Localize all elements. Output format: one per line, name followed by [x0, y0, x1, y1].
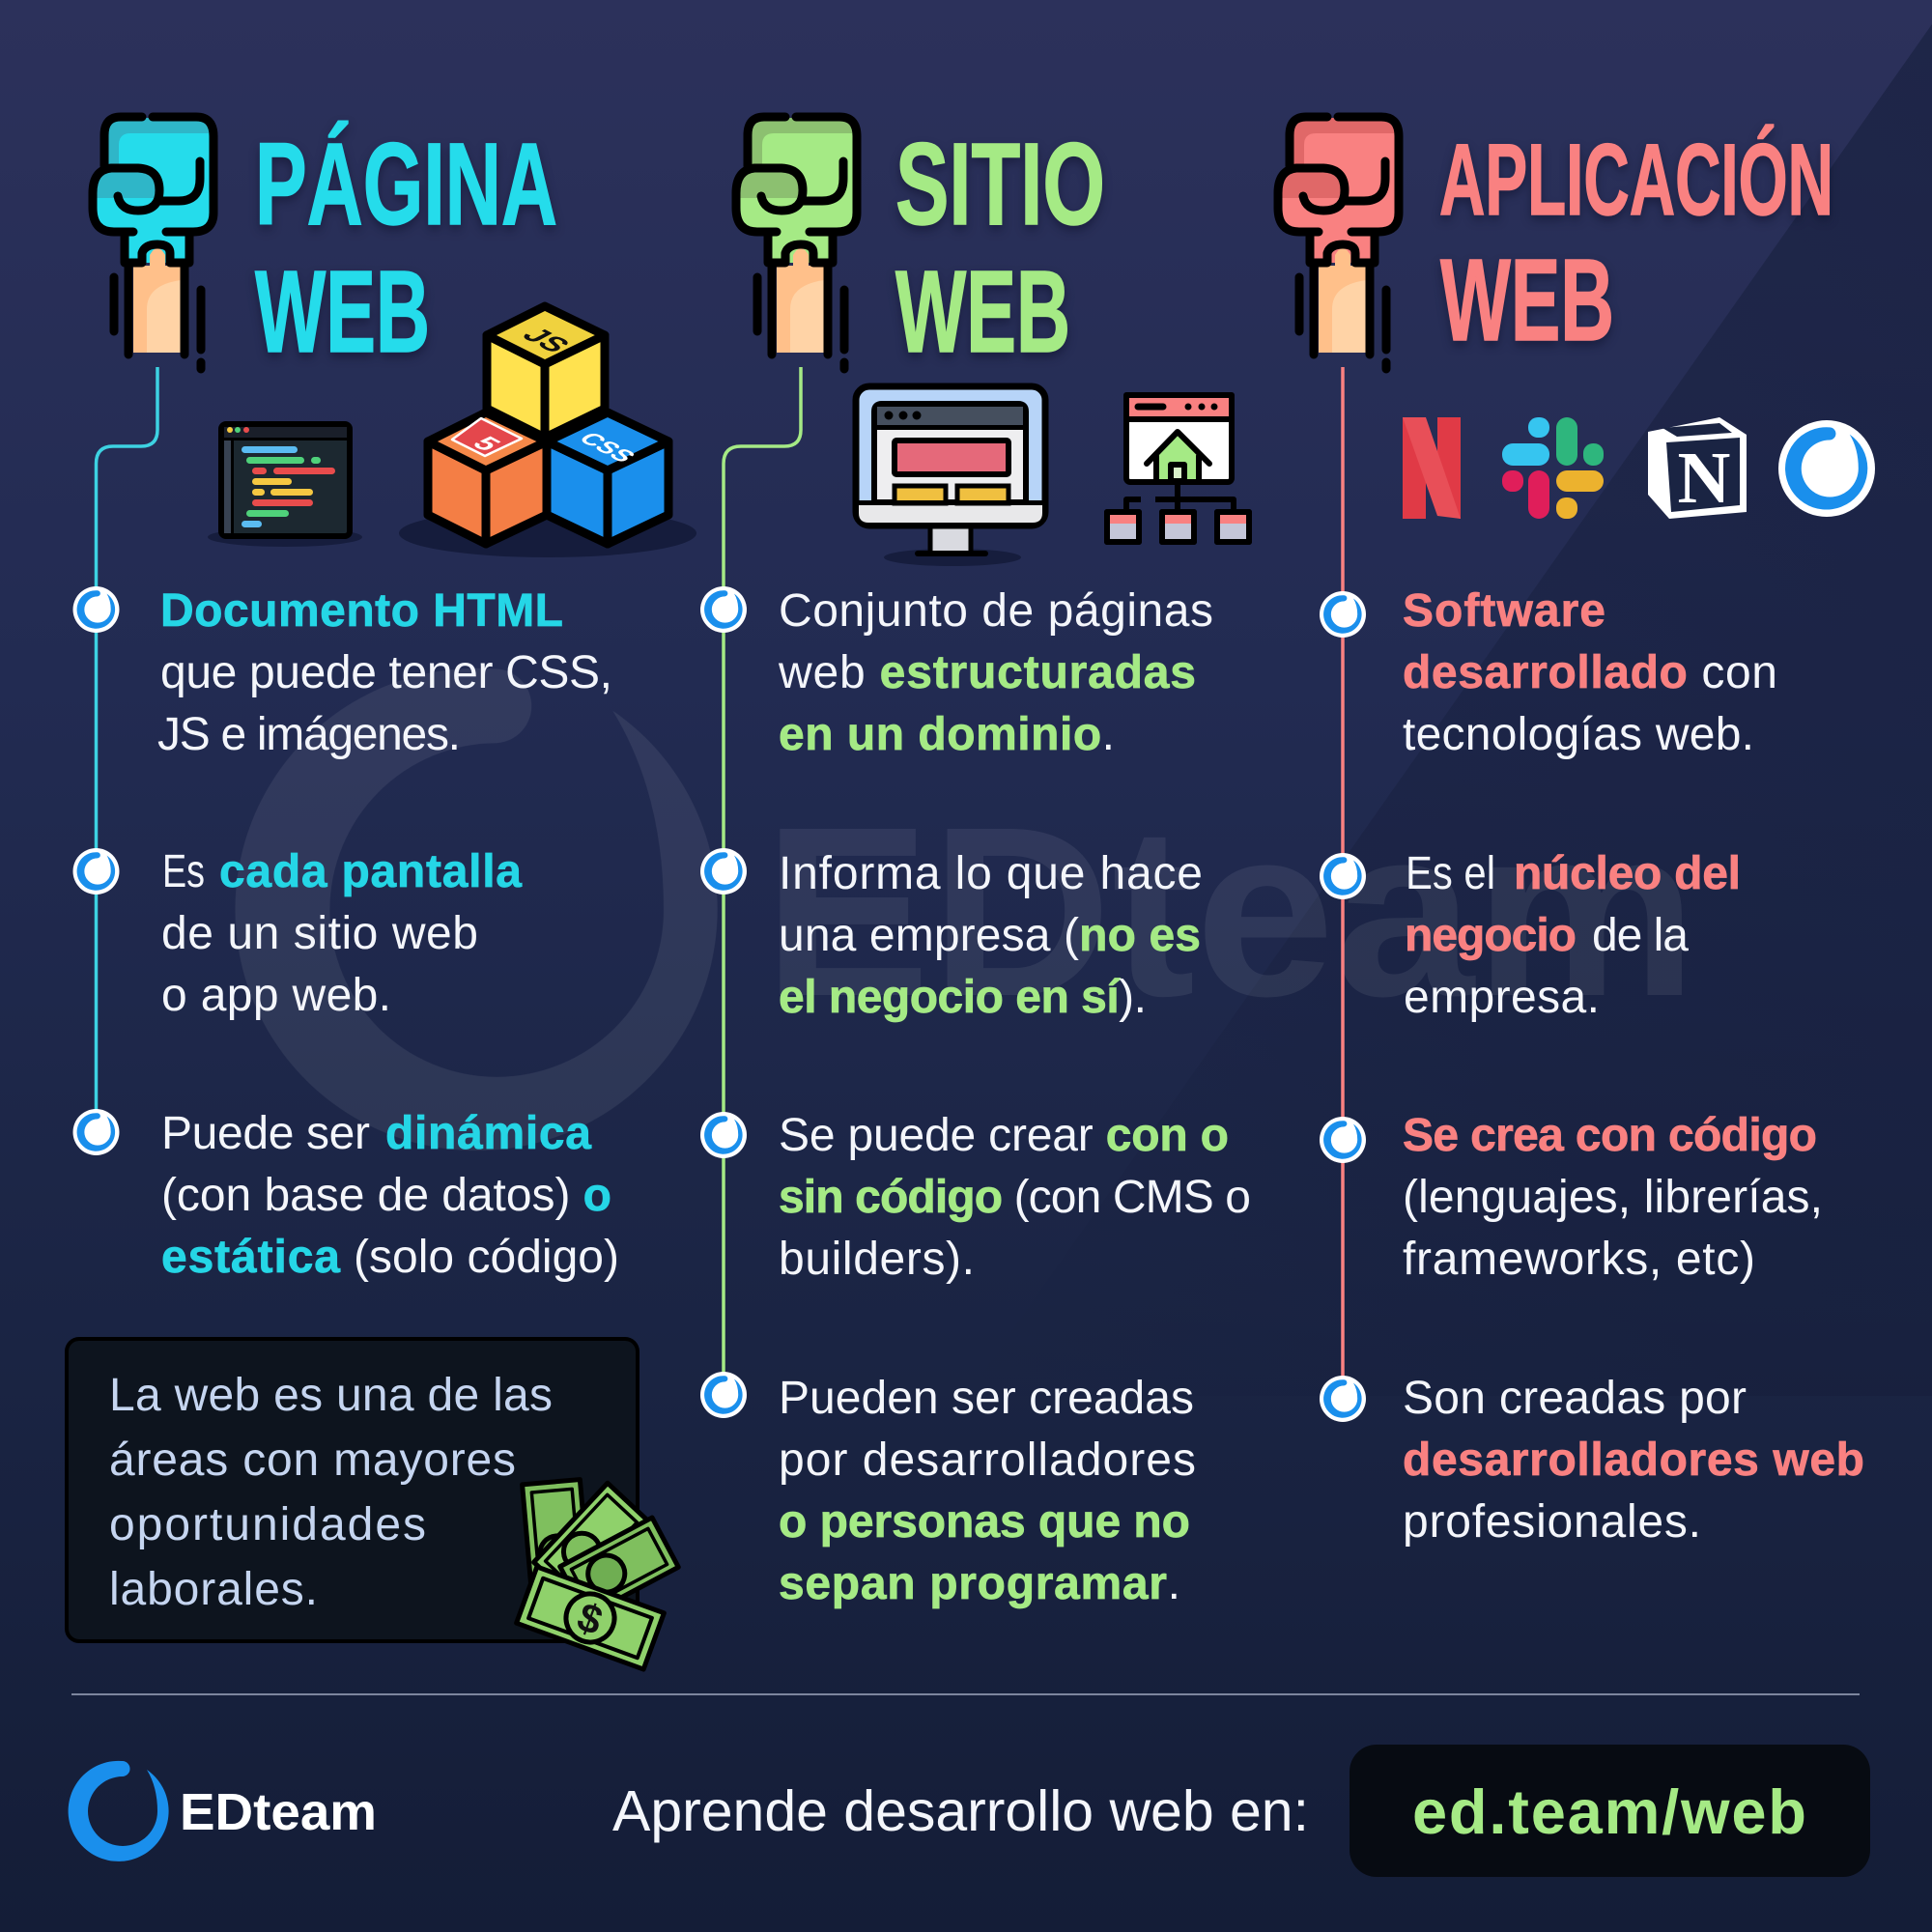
text: informa: Informa lo que hace	[779, 848, 1203, 899]
text: se crea con código: Se crea con código	[1403, 1110, 1817, 1161]
callout: oportunidades laborales: La web es una de las	[109, 1370, 553, 1421]
logo: EDteam	[69, 1761, 377, 1861]
callout: oportunidades laborales: áreas con mayores	[109, 1435, 516, 1486]
text: pueden ser creadas: o personas que no	[779, 1496, 1190, 1548]
text: software desarrollado: desarrollado con	[1403, 647, 1777, 698]
column: página web	[67, 117, 696, 1669]
text: conjunto de páginas: Conjunto de páginas	[779, 585, 1213, 637]
text: son creadas por: Son creadas por	[1403, 1373, 1747, 1424]
text: son creadas por: desarrolladores web	[1403, 1435, 1864, 1486]
text: dinámica o estática	[161, 1108, 619, 1283]
button: ed.team/web	[1350, 1745, 1870, 1877]
icon: money bills	[517, 1480, 678, 1669]
timeline: aplicación web	[1341, 367, 1345, 1399]
text: núcleo del negocio	[1404, 848, 1741, 1023]
text: documento HTML	[157, 585, 612, 760]
marker 1	[700, 586, 747, 633]
text: cada pantalla: Es	[162, 846, 205, 897]
marker 2	[1320, 853, 1366, 899]
cube: JS	[487, 306, 605, 438]
callout: oportunidades laborales	[67, 1339, 638, 1641]
title: PÁGINA WEB: WEB	[255, 245, 430, 377]
text: dinámica o estática: estática	[161, 1232, 340, 1283]
marker 1	[1320, 591, 1366, 638]
callout: oportunidades laborales: oportunidades	[109, 1499, 426, 1550]
text: cada pantalla: de un sitio web	[161, 908, 478, 959]
callout: oportunidades laborales: laborales.	[109, 1564, 318, 1615]
icon: notion: N	[1678, 438, 1730, 519]
icon: netflix	[1403, 417, 1461, 519]
cube: CSS: CSS	[572, 429, 641, 466]
text: dinámica o estática: (solo código)	[354, 1232, 619, 1283]
cube: CSS	[547, 412, 668, 544]
marker 3	[1320, 1117, 1366, 1163]
marker 1	[73, 586, 120, 633]
marker 4	[700, 1372, 747, 1418]
icon: code editor	[208, 424, 362, 547]
text: son creadas por: profesionales.	[1403, 1496, 1701, 1548]
text: documento HTML: JS e imágenes.	[157, 709, 461, 760]
text: núcleo del negocio: núcleo del	[1514, 848, 1741, 899]
marker 3	[73, 1109, 120, 1155]
text: se crea con código	[1403, 1110, 1823, 1285]
text: dinámica o estática: dinámica	[385, 1108, 591, 1159]
text: software desarrollado	[1403, 585, 1777, 760]
logo: EDteam: EDteam	[180, 1783, 377, 1841]
text: cada pantalla: cada pantalla	[219, 846, 522, 897]
text: conjunto de páginas: en un dominio.	[779, 709, 1115, 760]
title: SITIO WEB	[895, 118, 1105, 377]
text: cada pantalla	[161, 846, 522, 1021]
cube: JS: JS	[515, 323, 579, 356]
title: SITIO WEB: WEB	[895, 245, 1070, 377]
watermark: EDteam logo: EDteam	[763, 777, 1697, 1046]
timeline: sitio web	[724, 367, 801, 1395]
text: se crea con código: frameworks, etc)	[1403, 1234, 1755, 1285]
text: conjunto de páginas	[778, 585, 1213, 760]
text: informa: una empresa (no es	[779, 910, 1201, 961]
text: informa: el negocio en sí).	[779, 972, 1147, 1023]
icon: html css js cubes	[399, 306, 696, 557]
watermark: EDteam logo	[235, 668, 1697, 1151]
button: ed.team/web: ed.team/web	[1412, 1776, 1806, 1847]
cube: HTML5: 5	[466, 433, 507, 455]
text: conjunto de páginas: web estructuradas	[778, 647, 1196, 698]
icon: fist red	[1278, 117, 1399, 369]
text: aprende desarrollo web: Aprende desarrollo web en:	[612, 1779, 1309, 1843]
text: pueden ser creadas: sepan programar.	[779, 1558, 1180, 1609]
marker 2	[700, 848, 747, 895]
text: pueden ser creadas: Pueden ser creadas	[779, 1373, 1194, 1424]
footer	[69, 1745, 1870, 1877]
text: se crea con código: (lenguajes, librerías,	[1403, 1172, 1823, 1223]
icon: slack	[1502, 417, 1604, 519]
title: PÁGINA WEB	[255, 118, 557, 377]
icon: site map	[1107, 395, 1249, 542]
text: software desarrollado: Software	[1403, 585, 1605, 637]
marker 3	[700, 1112, 747, 1158]
text: con o sin código: Se puede crear con o	[779, 1110, 1229, 1161]
text: documento HTML: que puede tener CSS,	[160, 647, 612, 698]
cube: HTML5	[428, 412, 547, 544]
marker 4	[1320, 1376, 1366, 1422]
text: dinámica o estática: (con base de datos) o	[161, 1170, 611, 1221]
text: pueden ser creadas	[779, 1373, 1196, 1609]
text: núcleo del negocio: de la	[1592, 910, 1689, 961]
icon: edteam	[1778, 420, 1875, 517]
text: núcleo del negocio: empresa.	[1404, 972, 1600, 1023]
marker 2	[73, 848, 120, 895]
title: PÁGINA WEB: PÁGINA	[255, 118, 557, 249]
text: pueden ser creadas: por desarrolladores	[779, 1435, 1196, 1486]
icon: money bills: $	[572, 1593, 609, 1644]
title: SITIO WEB: SITIO	[895, 118, 1105, 249]
text: con o sin código: builders).	[779, 1234, 975, 1285]
text: software desarrollado: tecnologías web.	[1403, 709, 1754, 760]
timeline: página web	[97, 367, 157, 1132]
text: dinámica o estática: Puede ser	[161, 1108, 370, 1159]
text: cada pantalla: o app web.	[161, 970, 391, 1021]
column: sitio web	[700, 117, 1251, 1609]
text: documento HTML: Documento HTML	[160, 585, 563, 637]
title: APLICACIÓN WEB: WEB	[1440, 234, 1614, 365]
text: núcleo del negocio: negocio	[1405, 910, 1577, 961]
text: informa	[779, 848, 1203, 1023]
column: aplicación web	[1278, 117, 1875, 1548]
icon: fist cyan	[93, 117, 213, 369]
text: con o sin código	[779, 1110, 1251, 1285]
icon: fist green	[736, 117, 857, 369]
text: son creadas por	[1403, 1373, 1864, 1548]
title: APLICACIÓN WEB	[1439, 124, 1833, 365]
icon: notion	[1648, 417, 1747, 519]
text: con o sin código: sin código (con CMS o	[779, 1172, 1251, 1223]
text: núcleo del negocio: Es el	[1406, 848, 1495, 899]
icon: monitor	[856, 386, 1045, 566]
